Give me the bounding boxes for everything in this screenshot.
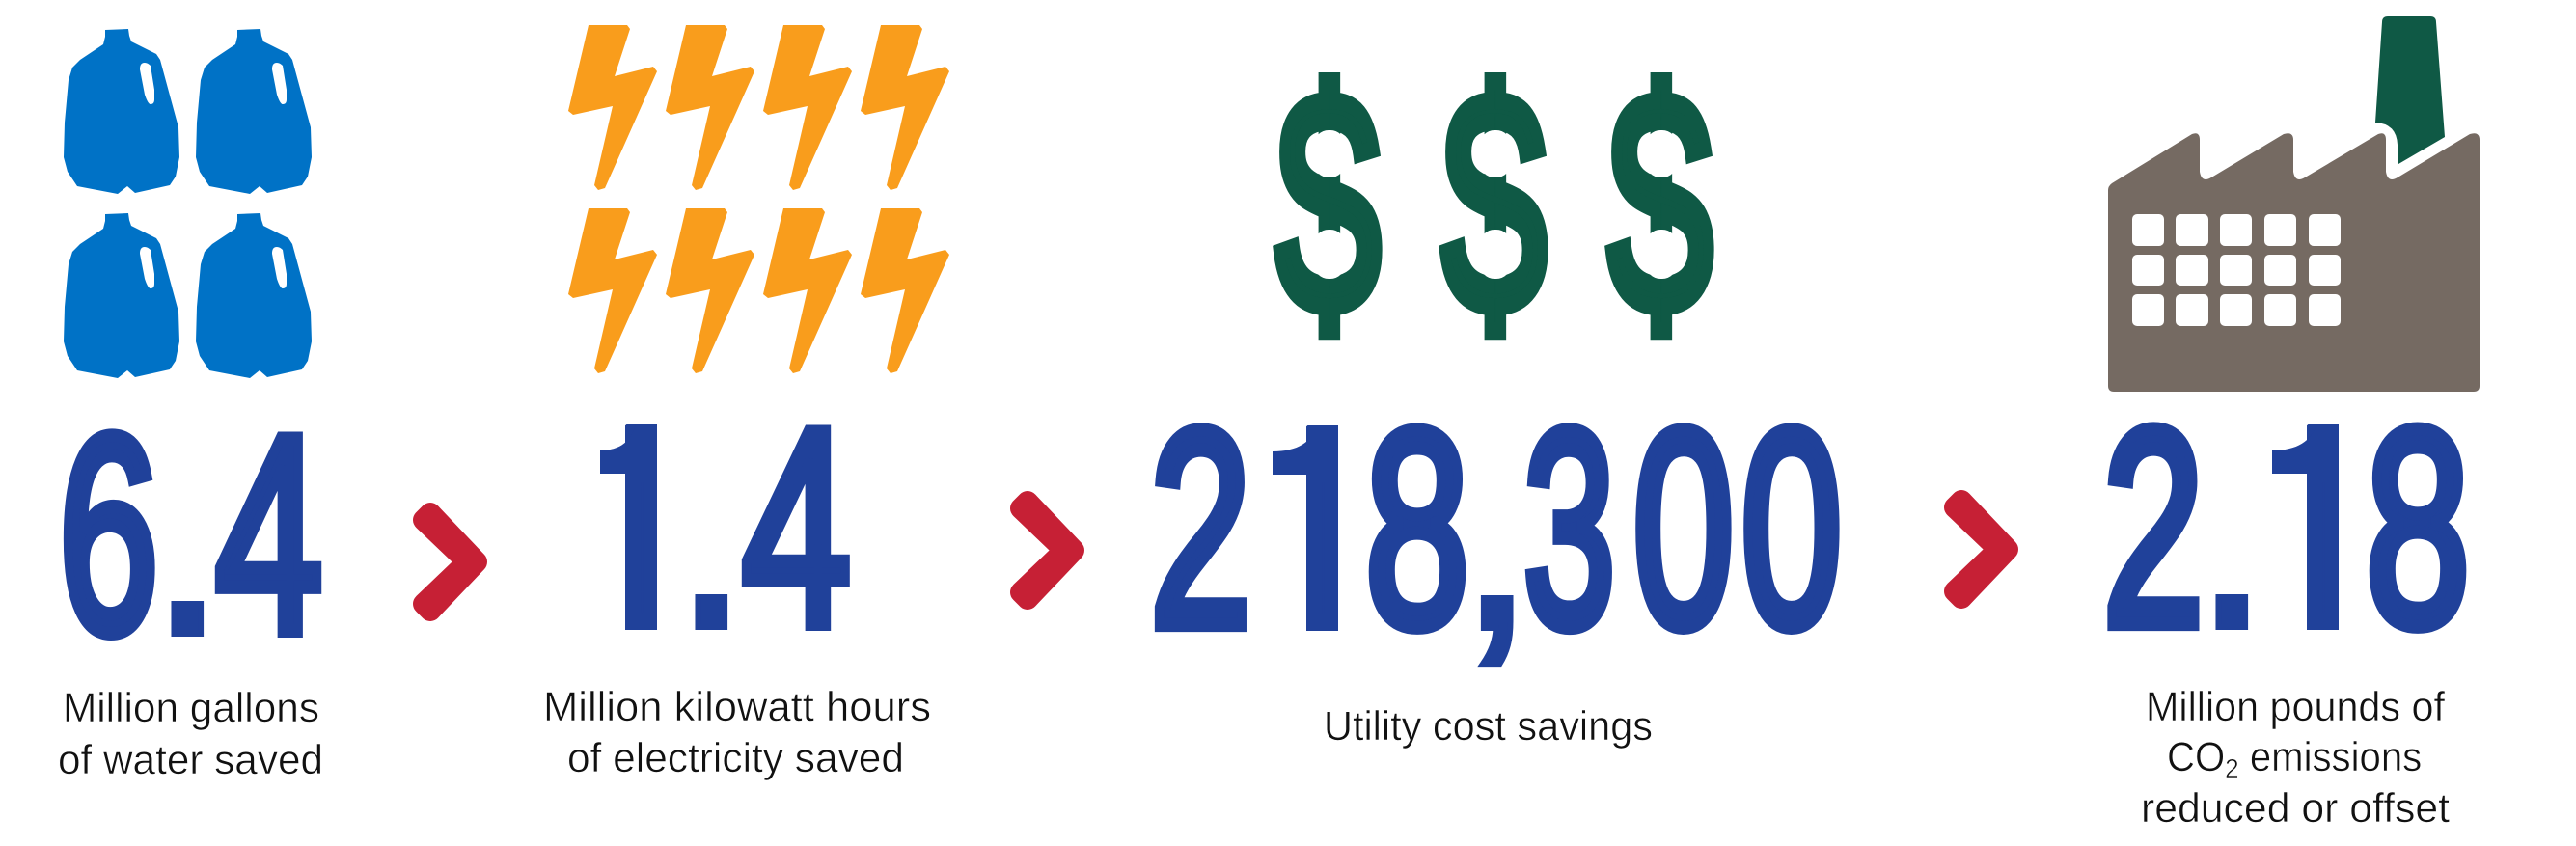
arrow: chevron two	[1021, 502, 1074, 599]
icon: three dollar signs	[1277, 30, 1712, 375]
number: 2.18	[2103, 371, 2470, 687]
arrow: chevron three	[1955, 501, 2008, 598]
icon: factory with smokestack	[2108, 16, 2480, 392]
caption: electricity saved: Million kilowatt hours	[543, 684, 931, 730]
number: 218,300: 0	[1740, 372, 1842, 685]
number: 218,300: 2	[1150, 372, 1251, 685]
caption: CO2 emissions: Million pounds of	[2146, 684, 2446, 730]
caption: CO2 emissions: reduced or offset	[2141, 785, 2450, 832]
caption: utility cost savings: Utility cost savings	[1324, 703, 1653, 750]
caption: electricity saved: of electricity saved	[567, 735, 904, 781]
number: 218,300: 3	[1523, 372, 1615, 685]
number: 6.4	[59, 377, 322, 694]
number: 218,300: 8	[1365, 373, 1469, 685]
caption: electricity saved	[543, 684, 931, 781]
caption: CO2 emissions: 2	[2225, 752, 2239, 783]
caption: CO2 emissions: emissions	[2239, 733, 2422, 779]
number: 218,300: 0	[1632, 372, 1734, 685]
icon: four water jugs	[64, 29, 312, 378]
arrow: chevron one	[424, 513, 477, 611]
number: 6.4: 6	[59, 378, 158, 691]
caption: CO2 emissions	[2141, 684, 2450, 832]
number: 218,300	[1150, 372, 1842, 688]
icon: three dollar signs: $	[1277, 30, 1380, 375]
icon: three dollar signs: $	[1609, 30, 1712, 375]
number: 2.18: .	[2193, 374, 2271, 687]
caption: water saved	[58, 685, 323, 783]
number: 6.4: .	[149, 381, 227, 694]
number: 1.4: 1	[577, 372, 699, 684]
icon: three dollar signs: $	[1443, 30, 1546, 375]
number: 6.4: 4	[215, 377, 322, 691]
number: 1.4: .	[672, 374, 751, 687]
caption: CO2 emissions: CO	[2167, 733, 2225, 779]
icon: eight lightning bolts	[568, 25, 949, 373]
number: 218,300: 1	[1258, 373, 1380, 685]
number: 2.18: 8	[2366, 372, 2470, 684]
number: 218,300: ,	[1458, 375, 1536, 688]
number: 1.4: 4	[742, 371, 851, 685]
caption: water saved: of water saved	[58, 737, 323, 783]
number: 2.18: 1	[2260, 372, 2380, 684]
caption: water saved: Million gallons	[63, 685, 319, 731]
number: 2.18: 2	[2103, 371, 2204, 684]
number: 1.4	[569, 371, 851, 687]
